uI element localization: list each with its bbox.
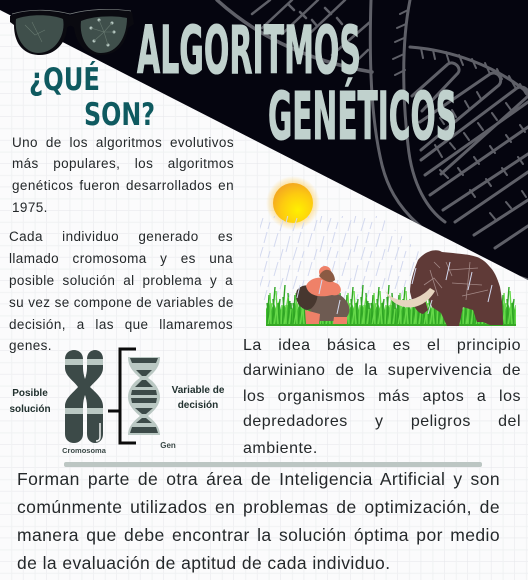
- heading: ¿Qué son?: ¿QUÉ: [29, 62, 100, 98]
- icon: sunglasses: [10, 9, 131, 55]
- icon: sun: [266, 176, 320, 230]
- bracket: [108, 349, 136, 443]
- text block: cromosoma: su vez se compone de variables de: [9, 295, 234, 310]
- label: posible: Posible: [12, 388, 48, 399]
- label: decisión: decisión: [178, 400, 218, 411]
- text block: cromosoma: genes.: [9, 338, 52, 353]
- DNA line drawing: [217, 0, 528, 280]
- divider bar: [64, 462, 482, 467]
- text block: cromosoma: llamado cromosoma y es una: [9, 251, 233, 266]
- text block: cromosoma: Cada individuo generado es: [9, 229, 233, 244]
- text block: introducción: 1975.: [12, 200, 48, 215]
- text block: cromosoma: [9, 229, 234, 353]
- text block: idea básica: La idea básica es el principio: [243, 337, 521, 354]
- title: Algoritmos Genéticos: [136, 12, 457, 150]
- label: cromosoma: Cromosoma: [62, 446, 107, 455]
- text block: inteligencia artificial: Forman parte de otra área de Inteligencia Artificial y son: [17, 469, 500, 489]
- text block: idea básica: darwiniano de la supervivencia de: [243, 362, 521, 379]
- text block: inteligencia artificial: comúnmente utilizados en problemas de optimización, de: [17, 497, 500, 517]
- heading: ¿Qué son?: [29, 61, 155, 133]
- text block: idea básica: ambiente.: [243, 440, 318, 457]
- text block: inteligencia artificial: de la evaluación de aptitud de cada individuo.: [17, 553, 390, 573]
- label: variable de: Variable de: [172, 385, 225, 396]
- text block: introducción: [12, 135, 234, 215]
- chromosome: [65, 350, 103, 443]
- text block: cromosoma: posible solución al problema y a: [9, 273, 233, 288]
- illustration: sun, rain, caveman and mammoth: [260, 176, 516, 326]
- text block: idea básica: los organismos más aptos a los: [243, 388, 521, 405]
- grass: [266, 285, 516, 326]
- label: gen: Gen: [160, 441, 176, 450]
- mammoth: [385, 250, 503, 326]
- text block: introducción: más populares, los algoritmos: [12, 156, 234, 171]
- diagram: cromosoma y gen: [9, 348, 225, 455]
- text block: idea básica: [243, 337, 521, 457]
- text block: cromosoma: decisión, a las que llamaremos: [9, 317, 233, 332]
- caveman: [296, 266, 349, 324]
- label: solución: solución: [9, 404, 51, 415]
- text block: idea básica: depredadores y peligros del: [243, 413, 521, 430]
- text block: inteligencia artificial: manera que debe encontrar la solución óptima por medio: [17, 525, 500, 545]
- dark diagonal panel: [0, 0, 528, 280]
- gene double helix: [128, 357, 160, 435]
- text block: introducción: Uno de los algoritmos evolutivos: [12, 135, 234, 150]
- rain over figures: [297, 262, 492, 314]
- text block: introducción: genéticos fueron desarrollados en: [12, 178, 234, 193]
- rain: [260, 216, 430, 300]
